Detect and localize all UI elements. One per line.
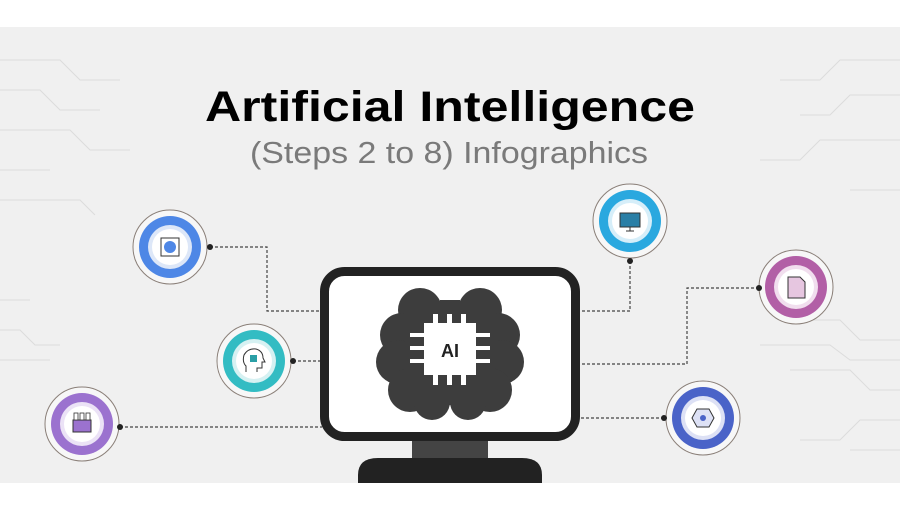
icon: AI brain chip: [376, 288, 524, 420]
connector lines: [120, 247, 759, 427]
monitor: AI: [441, 341, 459, 361]
icon: magenta document: [756, 250, 833, 324]
monitor: [324, 272, 576, 483]
icon: purple left: [45, 387, 123, 461]
subtitle: (Steps 2 to 8) Infographics: [250, 135, 648, 170]
icon: teal head chip: [217, 324, 296, 398]
icon: blue brain chip: [133, 210, 213, 284]
icon: sky blue monitor: [593, 184, 667, 264]
title: Artificial Intelligence: [205, 83, 695, 131]
icon: blue network hexagon: [661, 381, 740, 455]
